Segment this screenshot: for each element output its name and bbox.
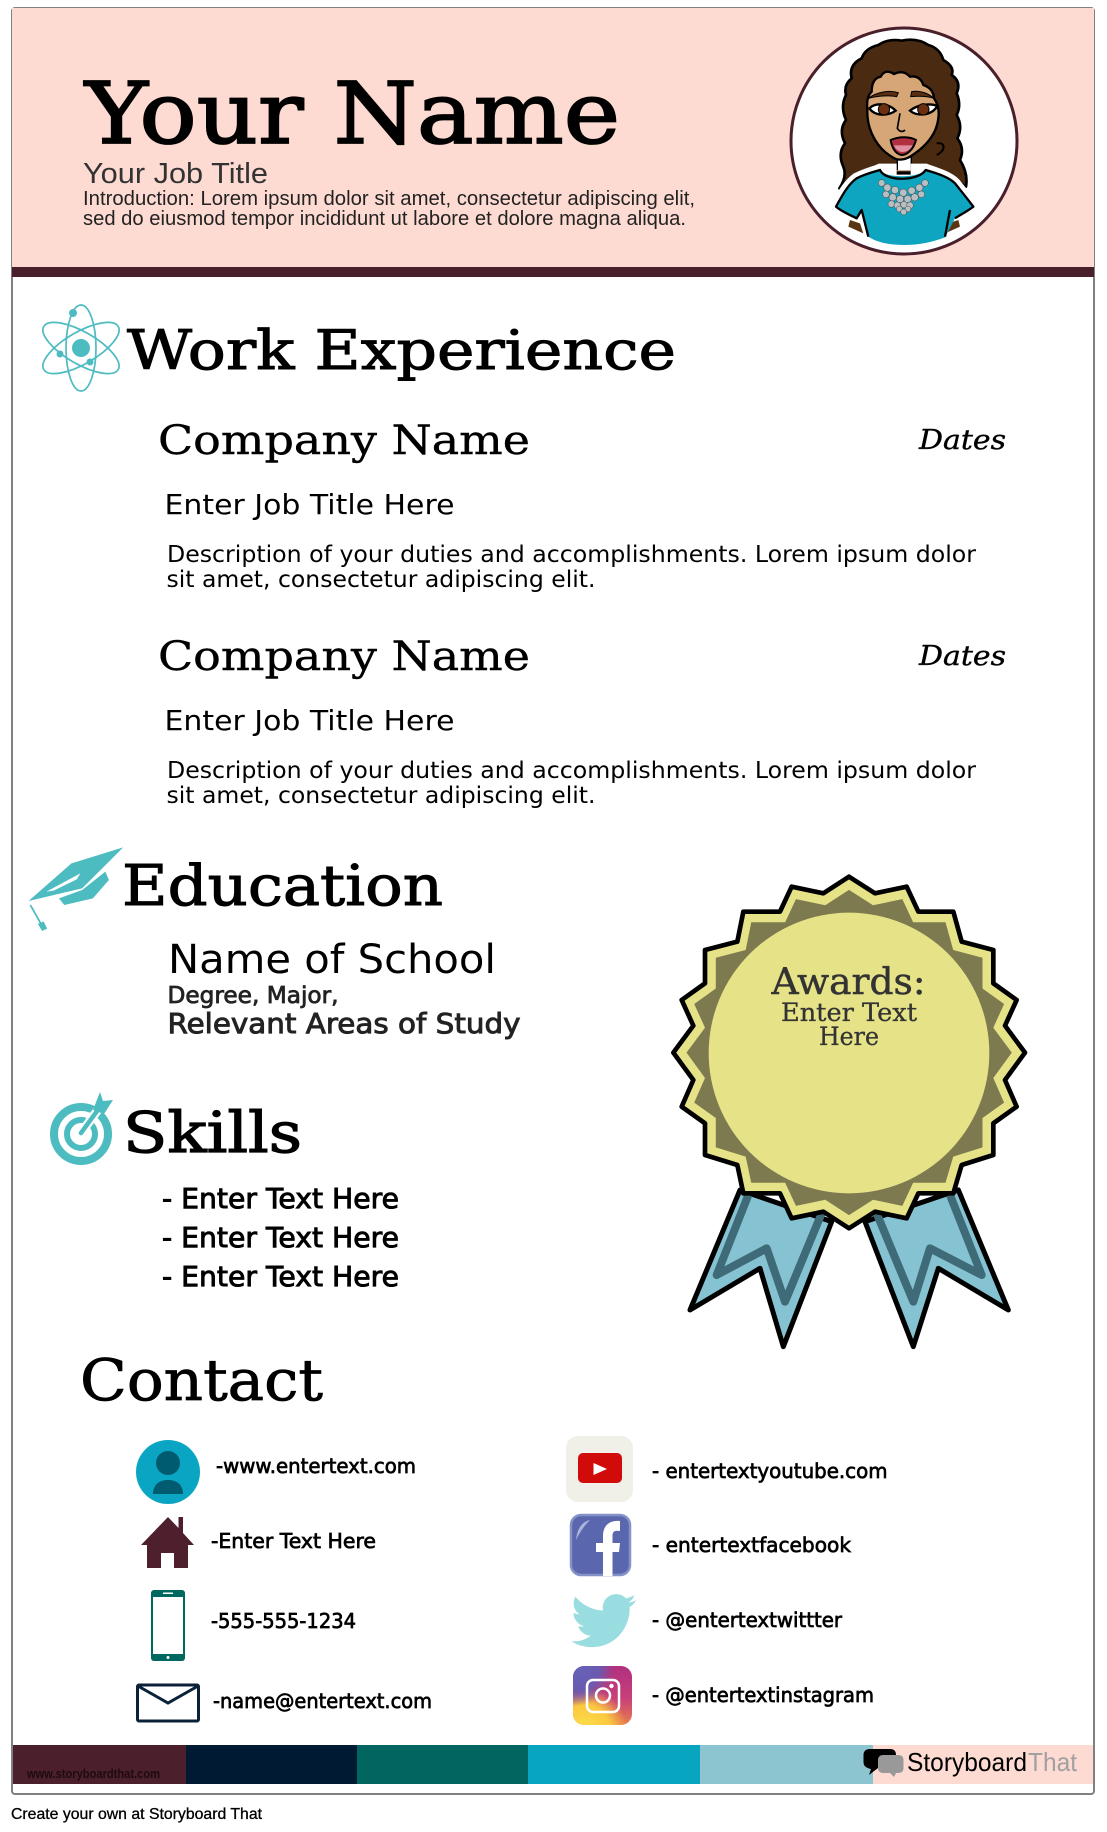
instagram text: - @entertextinstagram <box>652 1683 874 1707</box>
website text: -www.entertext.com <box>216 1454 416 1478</box>
panel: work experience <box>36 305 1006 809</box>
footer colour bar <box>13 1745 1093 1784</box>
credit line: Create your own at Storyboard That <box>11 1806 263 1823</box>
icon: graduation cap <box>29 847 123 931</box>
icon: avatar portrait <box>791 28 1017 254</box>
awards text: Awards: <box>770 962 926 1003</box>
email text: -name@entertext.com <box>213 1689 432 1713</box>
icon: twitter bird <box>571 1594 636 1647</box>
job entry 2 <box>158 634 1006 809</box>
skills list: - Enter Text Here <box>162 1222 399 1254</box>
icon: envelope <box>138 1685 198 1721</box>
icon: facebook <box>571 1515 630 1576</box>
introduction text: sed do eiusmod tempor incididunt ut labore et dolore magna aliqua. <box>83 208 686 230</box>
job entry 1: Enter Job Title Here <box>164 488 454 521</box>
job entry 2: Description of your duties and accomplishments. Lorem ipsum dolor <box>167 758 977 784</box>
icon: storyboard logo <box>864 1749 904 1777</box>
heading: skills: Skills <box>123 1101 302 1166</box>
icon: house <box>141 1517 194 1568</box>
job title: Your Job Title <box>83 158 268 190</box>
skills list: - Enter Text Here <box>162 1261 399 1293</box>
job entry 1 <box>158 418 1006 593</box>
panel: contact <box>80 1348 888 1725</box>
skills list: - Enter Text Here <box>162 1183 399 1215</box>
icon: youtube <box>566 1436 633 1502</box>
address text: -Enter Text Here <box>211 1529 376 1553</box>
job entry 1: sit amet, consectetur adipiscing elit. <box>166 567 596 593</box>
panel: skills <box>54 1092 399 1293</box>
job entry 2: sit amet, consectetur adipiscing elit. <box>166 783 596 809</box>
panel: awards badge <box>673 877 1025 1347</box>
icon: phone <box>151 1590 185 1661</box>
heading: education: Education <box>122 854 443 919</box>
job entry 2: Dates <box>918 641 1006 672</box>
school details: Name of School <box>168 937 496 983</box>
job entry 2: Company Name <box>158 634 530 680</box>
icon: person <box>136 1440 200 1504</box>
school details <box>168 937 520 1040</box>
logo wordmark: That <box>1028 1747 1078 1777</box>
awards text <box>770 962 926 1051</box>
panel: education <box>29 847 521 1040</box>
header bottom bar <box>12 267 1094 277</box>
header background <box>12 8 1094 267</box>
job entry 1: Dates <box>918 425 1006 456</box>
heading: contact: Contact <box>80 1348 323 1414</box>
school details: Relevant Areas of Study <box>168 1007 520 1040</box>
skills list <box>162 1183 399 1293</box>
heading: work experience: Work Experience <box>127 319 676 382</box>
school details: Degree, Major, <box>168 981 338 1009</box>
icon: instagram <box>573 1666 632 1725</box>
icon: atom <box>36 305 126 391</box>
youtube text: - entertextyoutube.com <box>652 1459 888 1483</box>
panel: header <box>12 8 1094 277</box>
ribbons <box>690 1190 1008 1347</box>
facebook text: - entertextfacebook <box>652 1533 851 1557</box>
twitter text: - @entertextwittter <box>652 1608 843 1632</box>
phone text: -555-555-1234 <box>211 1609 356 1633</box>
awards text: Enter Text <box>781 998 917 1027</box>
awards text: Here <box>819 1022 879 1051</box>
job entry 2: Enter Job Title Here <box>164 704 454 737</box>
logo wordmark: Storyboard <box>907 1747 1027 1777</box>
job entry 1: Description of your duties and accomplishments. Lorem ipsum dolor <box>167 542 977 568</box>
medal seal <box>673 877 1025 1228</box>
introduction text: Introduction: Lorem ipsum dolor sit amet, consectetur adipiscing elit, <box>83 188 695 210</box>
watermark url: www.storyboardthat.com <box>26 1766 160 1781</box>
job entry 1: Company Name <box>158 418 530 464</box>
name title: Your Name <box>84 65 620 164</box>
introduction text <box>83 188 695 230</box>
icon: target <box>54 1092 113 1161</box>
